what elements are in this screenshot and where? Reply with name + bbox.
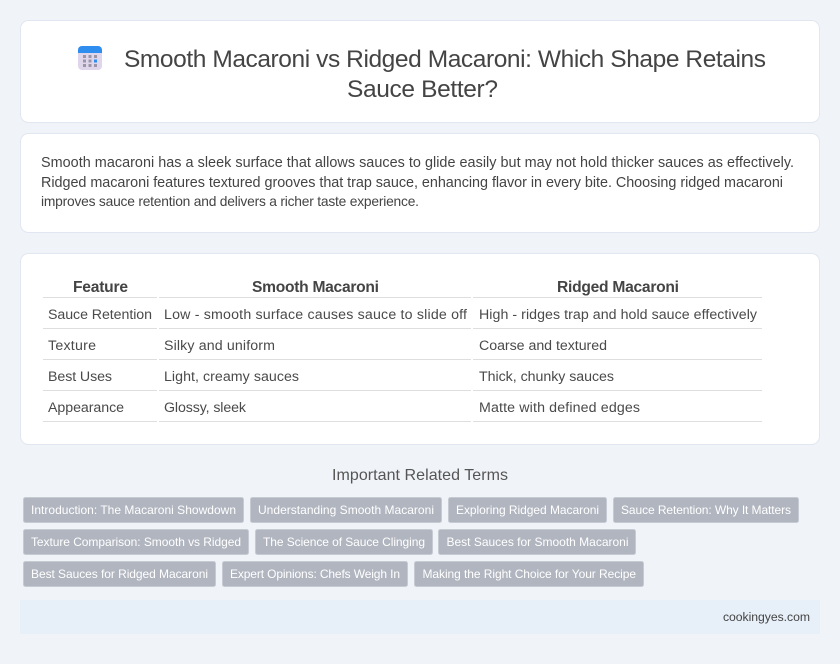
footer: cookingyes.com [723,610,810,624]
table row: texture: Texture [48,338,96,354]
table row: sauce retention: High - ridges trap and hold sauce effectively [479,307,758,323]
related terms tags: Understanding Smooth Macaroni [258,503,434,517]
panel: introduction text [20,134,820,232]
table header [73,279,679,296]
related terms tags: Sauce Retention: Why It Matters [621,503,791,517]
title: Sauce Better? [347,76,498,103]
related terms tags: Making the Right Choice for Your Recipe [422,567,636,581]
related terms tags: The Science of Sauce Clinging [263,535,425,549]
panel: introduction text: Smooth macaroni has a sleek surface that allows sauces to glide easily but may not hold thicker sauces as effectively. [41,155,794,171]
panel: title header [20,20,820,122]
table row: appearance [48,400,640,416]
related terms tags: Best Sauces for Ridged Macaroni [31,567,208,581]
related terms tags: Texture Comparison: Smooth vs Ridged [31,535,241,549]
related terms tags: Exploring Ridged Macaroni [456,503,599,517]
related terms tags: Expert Opinions: Chefs Weigh In [230,567,400,581]
related terms tags: Introduction: The Macaroni Showdown [31,503,236,517]
heading: important related terms: Important Related Terms [332,467,508,484]
table header: Feature [73,279,128,296]
table header: Smooth Macaroni [252,279,379,296]
table row: best uses: Light, creamy sauces [164,369,299,385]
panel: introduction text: improves sauce retention and delivers a richer taste experience. [41,194,419,209]
table row: best uses: Best Uses [48,369,112,385]
table header: Ridged Macaroni [557,279,679,296]
title: Smooth Macaroni vs Ridged Macaroni: Which Shape Retains [124,46,766,73]
title [124,46,766,103]
table row: best uses [48,369,614,385]
table row: texture: Coarse and textured [479,338,607,354]
footer [20,600,820,634]
table row: texture: Silky and uniform [164,338,275,354]
related terms tags [24,498,798,586]
table row: sauce retention [48,307,758,323]
table row: appearance: Appearance [48,400,124,416]
icon: calendar [78,46,102,70]
related terms tags: Best Sauces for Smooth Macaroni [446,535,628,549]
table row: best uses: Thick, chunky sauces [479,369,614,385]
table row: sauce retention: Low - smooth surface causes sauce to slide off [164,307,467,323]
table row: appearance: Matte with defined edges [479,400,640,416]
table row: sauce retention: Sauce Retention [48,307,152,323]
panel: introduction text: Ridged macaroni features textured grooves that trap sauce, enhancing flavor in every bite. Choosing ridged macaroni [41,175,783,191]
panel: comparison table [20,254,820,444]
table row: appearance: Glossy, sleek [164,400,247,416]
table row: texture [48,338,607,354]
